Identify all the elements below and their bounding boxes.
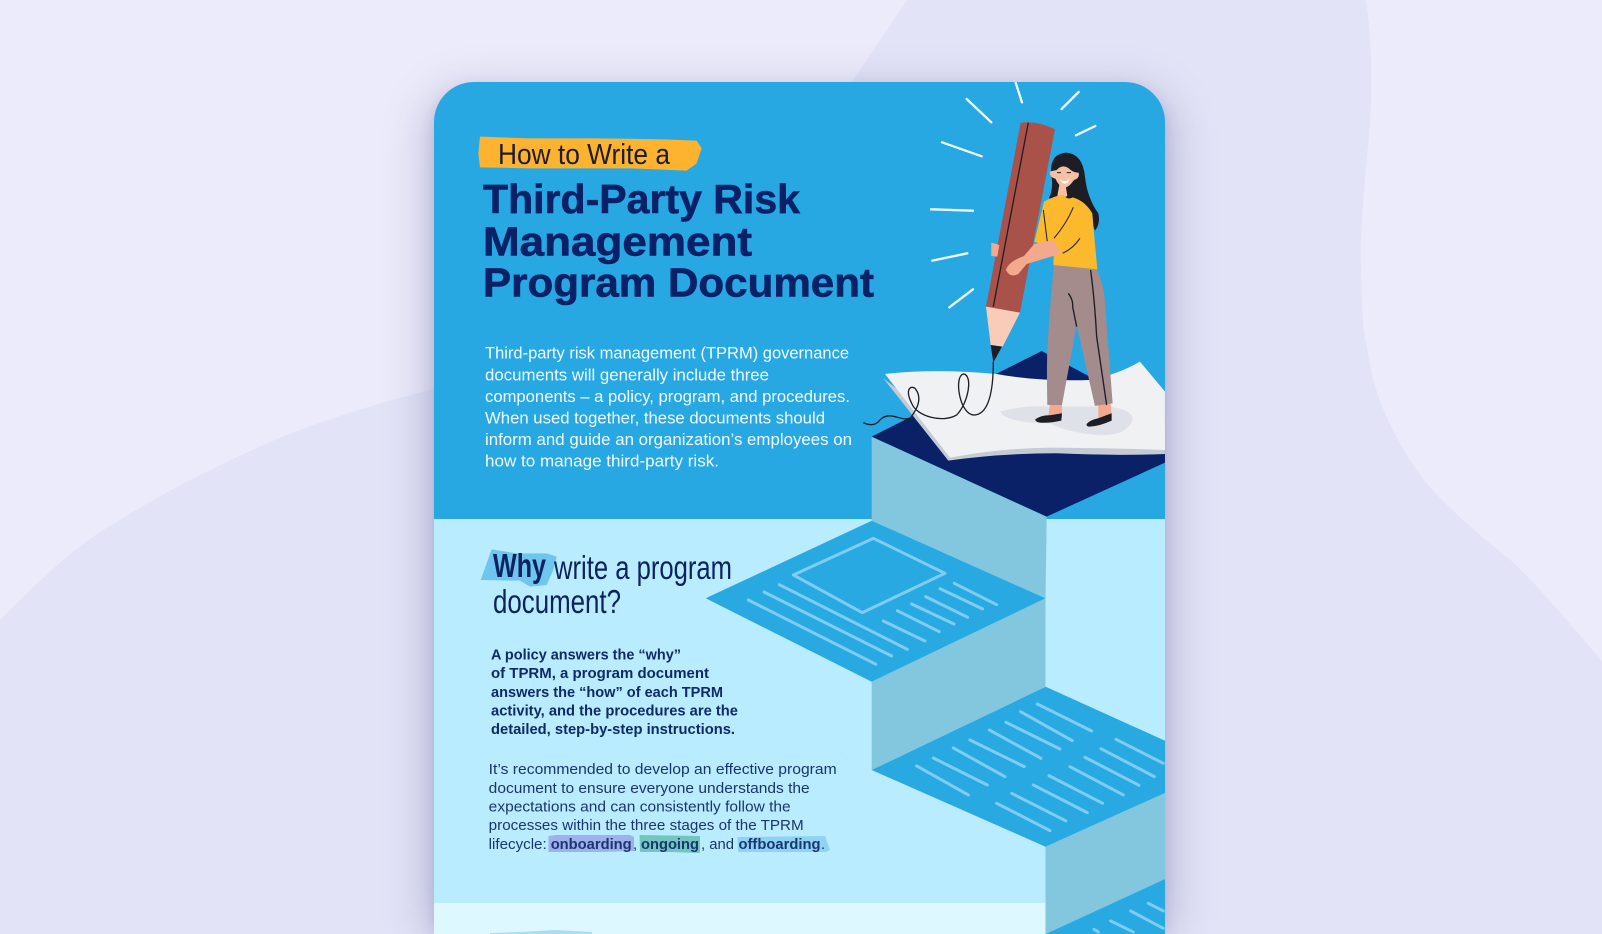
recommendation paragraph: processes within the three stages of the TPRM (489, 817, 804, 834)
woman (986, 122, 1113, 427)
highlight: offboarding: offboarding (738, 836, 820, 853)
recommendation paragraph: , and (701, 836, 734, 853)
shoes (1035, 413, 1112, 427)
intro text: how to manage third-party risk. (485, 452, 719, 470)
title (483, 176, 874, 306)
card shadow (428, 0, 1171, 934)
document sheet 3 (1046, 879, 1165, 934)
navy block top (872, 351, 1165, 517)
title: Management (483, 218, 752, 264)
heading: why write a program document: Why (493, 547, 546, 584)
block face 3 (1046, 793, 1165, 934)
trousers (1047, 265, 1113, 406)
light rays (931, 83, 1095, 307)
intro text (485, 344, 852, 470)
bold paragraph: of TPRM, a program document (491, 665, 709, 682)
highlight: offboarding: . (821, 836, 825, 853)
intro text: inform and guide an organization’s employees on (485, 431, 852, 449)
bold paragraph: A policy answers the “why” (491, 646, 681, 664)
highlight: onboarding: onboarding (551, 836, 632, 853)
bold paragraph: detailed, step-by-step instructions. (491, 721, 735, 738)
heading: why write a program document: write a program (553, 549, 732, 586)
recommendation paragraph: , (633, 836, 637, 853)
panel: header background (434, 82, 1165, 519)
paper sheet (883, 362, 1165, 461)
bold paragraph: activity, and the procedures are the (491, 702, 738, 720)
infographic card (434, 82, 1165, 934)
intro text: documents will generally include three (485, 366, 769, 384)
ink squiggle (863, 362, 993, 425)
face (1050, 166, 1079, 198)
shirt (1034, 195, 1097, 269)
panel: why section background (434, 519, 1165, 903)
recommendation paragraph: document to ensure everyone understands the (489, 780, 810, 797)
hair (1049, 153, 1099, 231)
recommendation paragraph: It’s recommended to develop an effective program (489, 761, 837, 778)
block face 2 (872, 598, 1046, 770)
heading: why write a program document (480, 549, 730, 614)
title: Program Document (483, 260, 874, 306)
bold paragraph (491, 646, 738, 738)
banner: How to Write a: How to Write a (498, 139, 671, 171)
title: Third-Party Risk (483, 176, 800, 222)
recommendation paragraph: lifecycle: (489, 836, 547, 853)
recommendation paragraph (489, 761, 837, 853)
floor shadow (1000, 406, 1133, 435)
next section heading highlight (490, 930, 592, 934)
bold paragraph: answers the “how” of each TPRM (491, 684, 723, 701)
panel: next section background (434, 903, 1165, 934)
highlight: ongoing: ongoing (641, 836, 699, 853)
heading: why write a program document: document? (493, 583, 621, 620)
document sheet 1 (706, 521, 1046, 682)
pencil (986, 122, 1055, 363)
intro text: components – a policy, program, and procedures. (485, 388, 850, 406)
block face 1 (872, 437, 1047, 598)
illustration: woman with giant pencil on document (863, 83, 1165, 517)
recommendation paragraph: expectations and can consistently follow the (489, 798, 791, 816)
intro text: Third-party risk management (TPRM) governance (485, 344, 849, 362)
arm and hands (1006, 240, 1062, 275)
legs (1048, 403, 1112, 420)
document sheet 2 (872, 687, 1165, 847)
isometric staircase of documents (706, 437, 1165, 934)
intro text: When used together, these documents should (485, 410, 825, 428)
face details (1057, 173, 1071, 184)
